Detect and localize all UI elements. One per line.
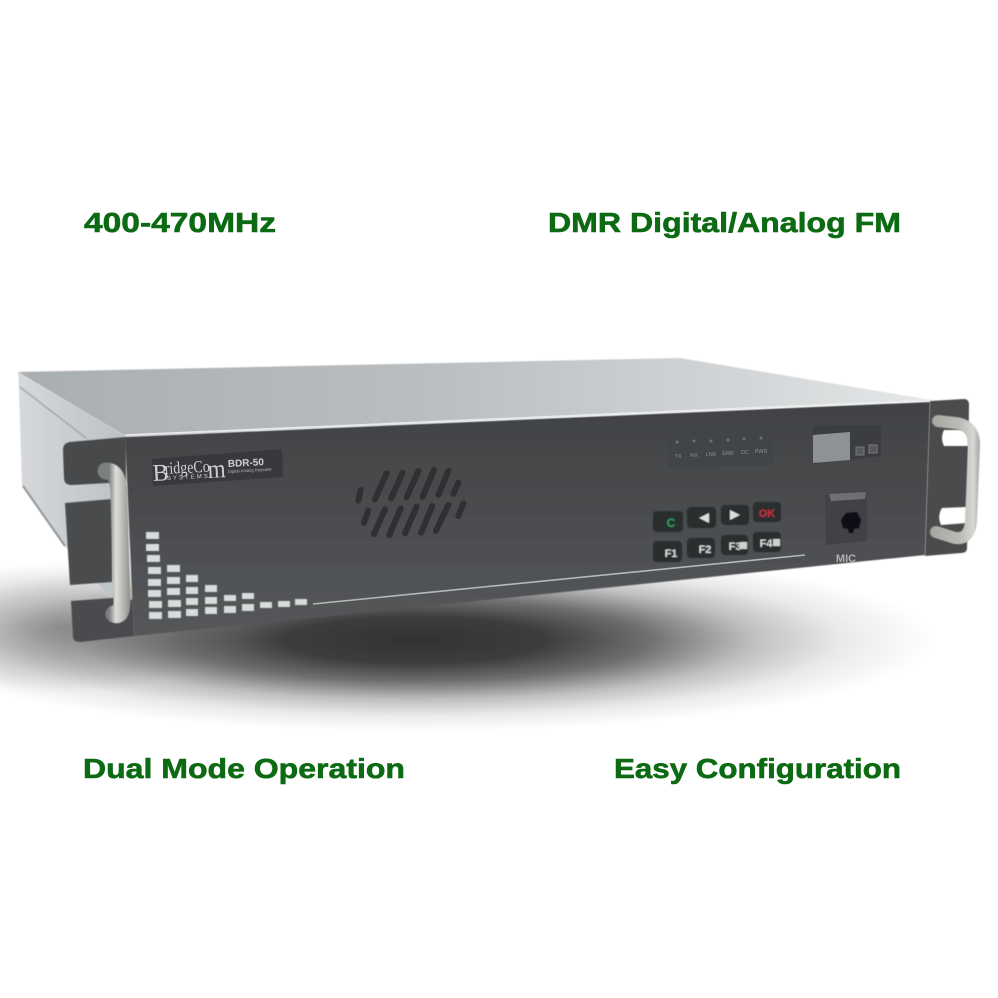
logo plate: ridgeCo xyxy=(164,457,210,478)
keypad xyxy=(653,502,781,562)
label: 400-470MHz: 400-470MHz xyxy=(84,207,276,238)
status LED panel: DC xyxy=(741,450,749,456)
chassis side panel xyxy=(18,372,125,600)
status LED panel: PWR xyxy=(755,449,767,455)
label: Dual Mode Operation: Dual Mode Operation xyxy=(83,753,405,784)
floor shadow xyxy=(0,548,935,732)
keypad: F4 xyxy=(760,538,773,550)
repeater unit xyxy=(18,358,974,642)
keypad: F1 xyxy=(665,548,677,560)
logo plate: B xyxy=(152,460,169,487)
keypad: C xyxy=(667,516,676,530)
panel accent line xyxy=(313,555,805,604)
logo plate: m xyxy=(207,454,226,484)
left handle xyxy=(106,471,122,615)
speaker grille xyxy=(358,470,463,535)
status LED panel: RX xyxy=(690,453,698,459)
keypad: OK xyxy=(759,508,775,520)
right rack ear xyxy=(925,399,969,556)
right handle xyxy=(936,421,974,538)
logo plate xyxy=(152,449,283,487)
MIC jack xyxy=(825,492,867,565)
chassis top panel xyxy=(18,358,932,436)
keypad: F2 xyxy=(699,544,711,556)
left rack ear xyxy=(63,437,134,642)
status LED panel: LNK xyxy=(706,452,717,458)
label: Easy Configuration: Easy Configuration xyxy=(614,753,901,784)
MIC jack: MIC xyxy=(836,553,856,565)
logo plate: SYSTEMS xyxy=(167,474,208,482)
keypad: F3 xyxy=(729,541,741,553)
front panel xyxy=(125,402,930,636)
label: DMR Digital/Analog FM: DMR Digital/Analog FM xyxy=(548,207,901,238)
logo plate: Digital-Analog Repeater xyxy=(228,467,272,474)
display module xyxy=(813,425,881,464)
level meter graphic xyxy=(146,532,307,619)
status LED panel: ERR xyxy=(722,451,734,457)
status LED panel: TX xyxy=(674,454,682,460)
status LED panel xyxy=(666,426,774,469)
logo plate: BDR-50 xyxy=(228,457,265,470)
